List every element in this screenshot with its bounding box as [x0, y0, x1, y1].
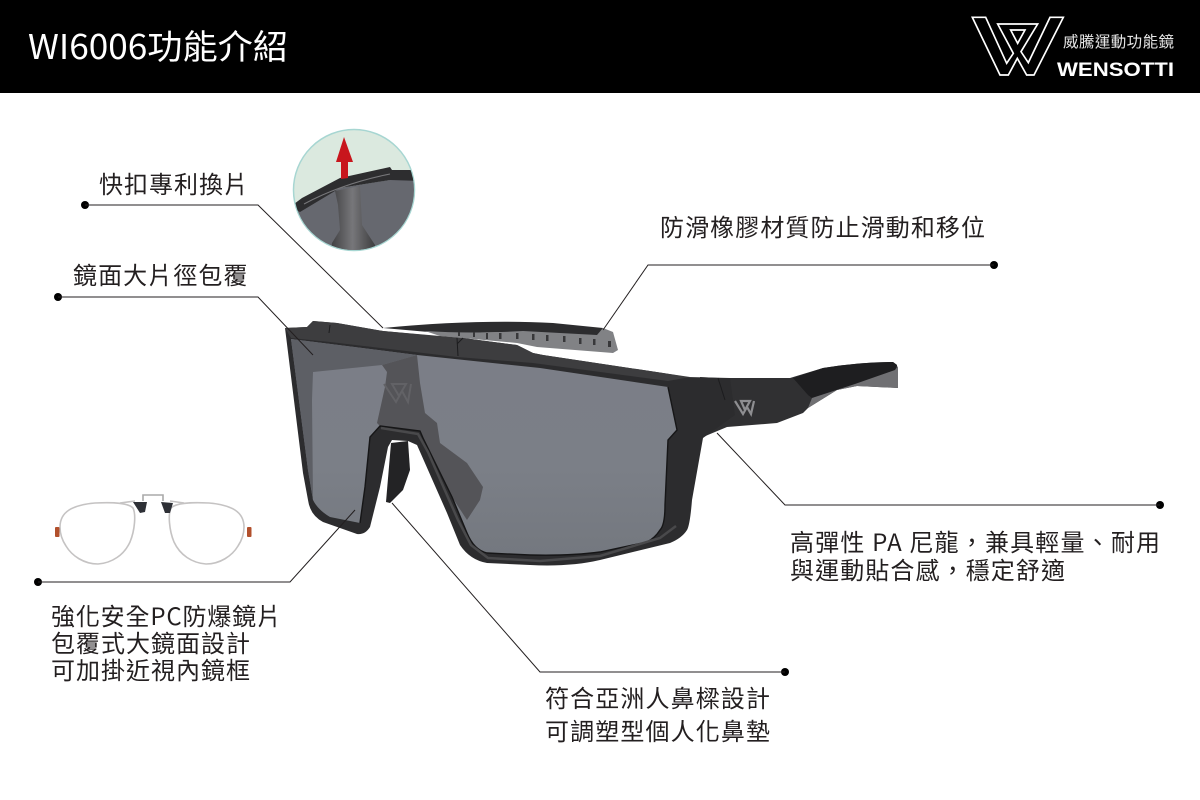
insert temple tips	[55, 527, 60, 537]
logo wordmark: WENSOTTI	[1057, 59, 1174, 81]
bridge logo reflection	[384, 384, 411, 402]
logo: WENSOTTI	[972, 17, 1174, 81]
callout: quick release	[81, 165, 383, 328]
lens inner frame edge	[360, 387, 677, 555]
callout: PC lens: 可加掛近視內鏡框	[51, 651, 250, 686]
top seams	[329, 325, 725, 400]
insert nose pads	[133, 502, 147, 513]
product: sunglasses	[285, 321, 898, 565]
callout: PC lens: 強化安全PC防爆鏡片	[51, 597, 281, 632]
title: WI6006功能介紹	[28, 20, 288, 69]
logo chinese name: 威騰運動功能鏡	[1063, 30, 1174, 52]
left lens upper shade	[291, 339, 417, 500]
anti-slip strip	[383, 322, 618, 353]
inset red arrow	[336, 137, 353, 179]
callout: anti-slip rubber: 防滑橡膠材質防止滑動和移位	[660, 208, 985, 243]
callout: quick release: 快扣專利換片	[99, 165, 248, 200]
callout: wrap lens	[54, 256, 313, 355]
bridge reflection	[377, 355, 483, 520]
callout: wrap lens: 鏡面大片徑包覆	[73, 256, 248, 291]
frame	[285, 321, 735, 565]
inset: quick-release detail	[292, 128, 416, 252]
callout: PA nylon: 與運動貼合感，穩定舒適	[790, 551, 1065, 586]
callout: nose pad: 可調塑型個人化鼻墊	[545, 712, 770, 747]
prescription insert frame	[55, 495, 252, 564]
inset bridge	[332, 187, 375, 250]
insert rims	[60, 495, 244, 564]
temple grip	[793, 362, 898, 408]
callout: PC lens: 包覆式大鏡面設計	[51, 624, 250, 659]
inset lens	[297, 176, 414, 250]
callout: PA nylon: 高彈性 PA 尼龍，兼具輕量、耐用	[790, 523, 1160, 558]
temple arm	[700, 362, 898, 437]
header bar	[0, 0, 1200, 93]
frame rim highlight	[381, 428, 676, 561]
callout: PC lens	[34, 510, 355, 686]
frame top surface	[285, 321, 690, 381]
temple logo	[735, 401, 754, 414]
inset frame rim	[290, 167, 420, 212]
callout: nose pad	[392, 503, 789, 747]
callout: nose pad: 符合亞洲人鼻樑設計	[545, 679, 770, 714]
lens	[291, 339, 677, 555]
nose pad	[386, 441, 410, 503]
callout: PA nylon	[717, 433, 1164, 586]
logo mark	[972, 17, 1063, 75]
callout: anti-slip rubber	[603, 208, 998, 330]
